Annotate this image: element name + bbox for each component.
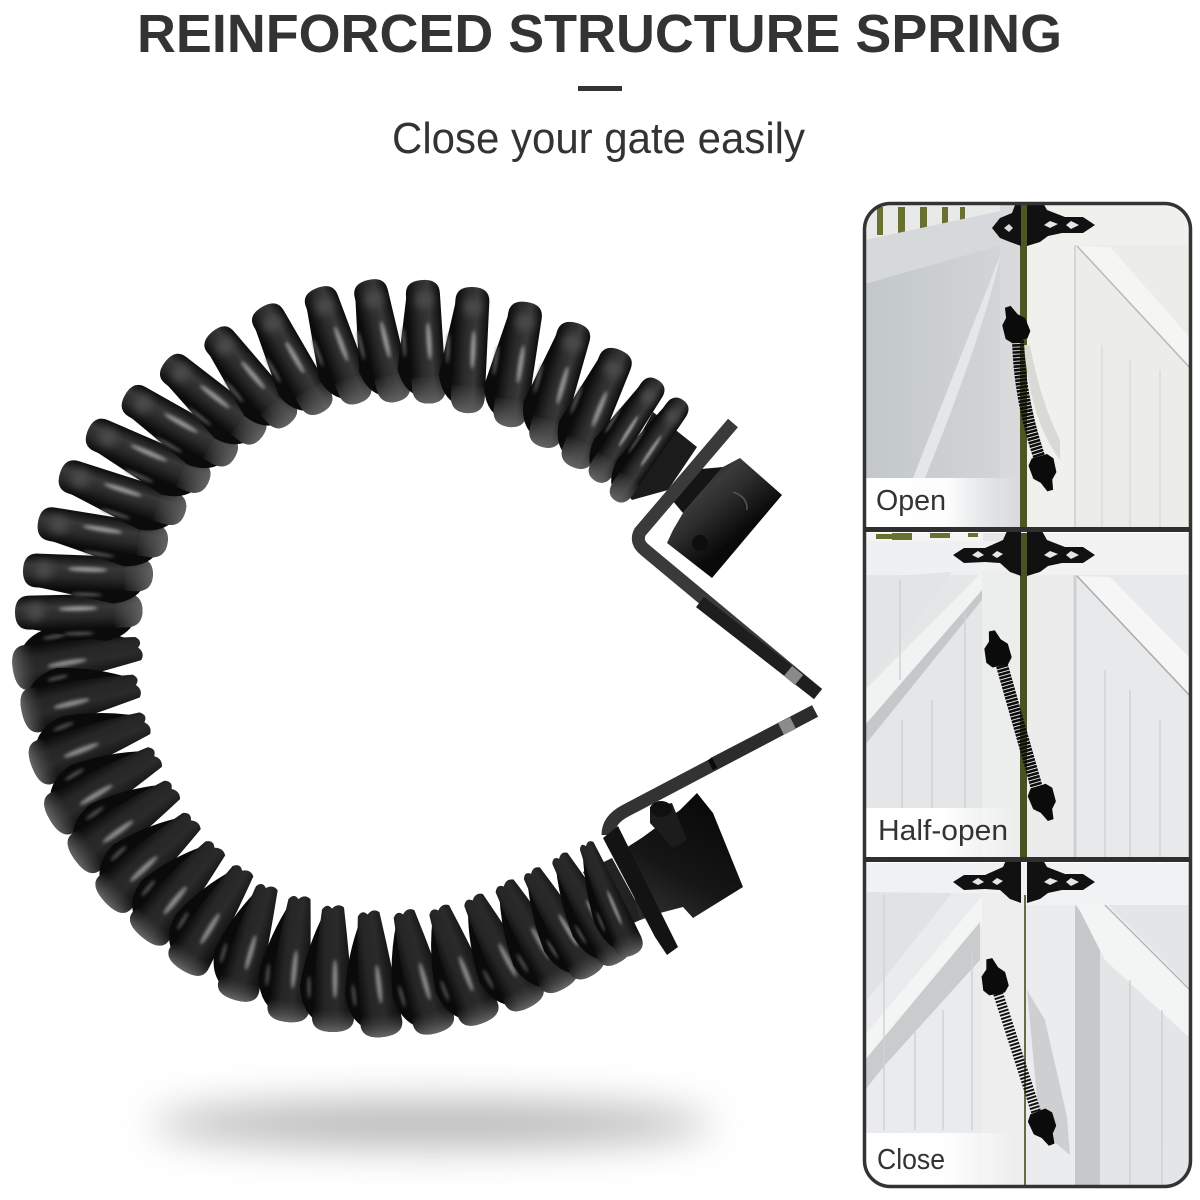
spring coils [7,276,636,1042]
label: open: Open [876,485,946,517]
label: close: Close [877,1144,945,1176]
spring on gate: open [996,302,1062,494]
spring on gate: half-open [980,628,1062,825]
gate photo: half-open [865,531,1192,858]
label: half-open: Half-open [878,815,1008,847]
coil spring product image [7,276,818,1042]
gate photo: open [865,201,1192,530]
title: REINFORCED STRUCTURE SPRING [137,4,1062,64]
title divider dash [578,86,622,91]
gate photos [865,201,1192,1188]
spring on gate: close [978,956,1063,1150]
ground shadow [152,1102,712,1146]
lower spring end cap and bracket [505,711,815,990]
subtitle: Close your gate easily [392,114,805,163]
upper spring end cap and bracket [576,368,818,694]
panel frame and dividers [864,204,1191,1186]
gate states panel [864,201,1192,1188]
gate photo: close [865,858,1192,1188]
